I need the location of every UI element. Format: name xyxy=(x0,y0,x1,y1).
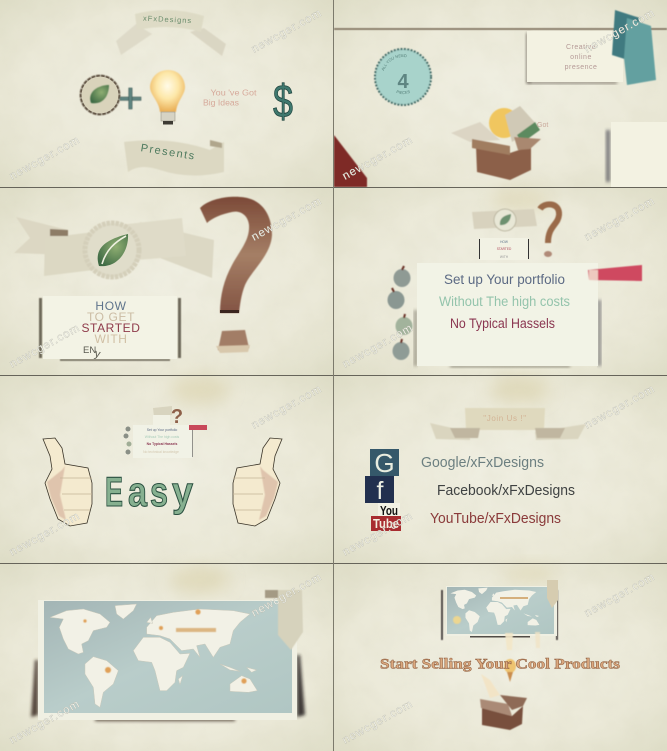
heading: easy: y xyxy=(172,468,194,515)
panel: join us xyxy=(365,408,586,531)
icon: question mark xyxy=(200,197,272,353)
heading: start selling: Start Selling Your Cool Products xyxy=(380,656,620,672)
watermarks: newcger.com xyxy=(583,195,657,244)
watermarks: newcger.com xyxy=(341,322,415,371)
mini card: WITH xyxy=(500,255,509,259)
ribbon: join us: "Join Us !" xyxy=(483,414,527,423)
card: portfolio benefits: Set up Your portfolio xyxy=(444,272,565,287)
text: social links: Google/xFxDesigns xyxy=(421,454,544,471)
small map xyxy=(441,580,558,640)
card: how to get started with: EN xyxy=(83,345,96,356)
icon: google: G xyxy=(374,448,395,478)
text: got fragment: Got xyxy=(537,122,548,129)
clothes line xyxy=(334,28,667,30)
mini storyboard xyxy=(124,406,207,458)
watermarks: newcger.com xyxy=(583,571,657,620)
red tape xyxy=(588,265,642,281)
watermarks: newcger.com xyxy=(8,698,82,747)
card: portfolio benefits xyxy=(414,263,601,368)
mini storyboard: ? xyxy=(171,406,183,428)
icon: facebook xyxy=(365,476,394,505)
watermarks: newcger.com xyxy=(8,322,82,371)
watermarks: newcger.com xyxy=(341,134,415,183)
icon: stamp 4 pieces: 4 xyxy=(397,71,409,93)
map pins xyxy=(83,609,247,684)
mini card: STARTED xyxy=(497,247,512,251)
panel: start selling xyxy=(380,580,620,730)
floating light bulbs xyxy=(453,616,540,698)
folded ribbon xyxy=(265,590,303,650)
text: you've got big ideas xyxy=(203,88,257,108)
mini storyboard: Without The high costs xyxy=(145,435,180,439)
note: creative online presence: presence xyxy=(565,64,597,71)
teal paper xyxy=(612,10,656,85)
mini ribbon badge xyxy=(472,209,537,231)
white note corner xyxy=(606,122,667,187)
panel: easy xyxy=(43,406,282,526)
ribbon with leaf badge xyxy=(14,217,214,278)
map land xyxy=(50,604,257,707)
map label bar xyxy=(176,628,216,632)
mini card: HOW xyxy=(500,240,508,244)
heading: easy xyxy=(105,468,194,515)
card: how to get started with xyxy=(39,296,181,361)
icon: dollar sign: $ xyxy=(273,75,293,127)
icon: light bulb xyxy=(150,70,185,124)
icon: box xyxy=(480,695,527,730)
icon: youtube: You xyxy=(380,504,398,518)
text: social links: Facebook/xFxDesigns xyxy=(437,482,575,499)
watermarks: newcger.com xyxy=(341,698,415,747)
text: you've got big ideas: You 've Got xyxy=(210,88,257,98)
icon: leaf badge xyxy=(81,76,119,114)
icon: right thumb up xyxy=(233,438,282,526)
card: how to get started with: STARTED xyxy=(81,321,141,335)
note: creative online presence xyxy=(526,31,623,84)
ribbon: presents xyxy=(124,140,224,176)
watermarks: newcger.com xyxy=(250,7,324,56)
ribbon: xFxDesigns: xFxDesigns xyxy=(143,14,192,25)
panel: creative online presence xyxy=(334,10,667,187)
card: portfolio benefits: No Typical Hassels xyxy=(450,316,555,331)
watermarks: newcger.com xyxy=(583,7,657,56)
mini storyboard: Set up Your portfolio xyxy=(147,428,177,432)
map card xyxy=(38,600,297,720)
watermarks: newcger.com xyxy=(250,383,324,432)
icon: leaf badge large xyxy=(85,223,139,277)
watermarks: newcger.com xyxy=(341,510,415,559)
icon: stamp 4 pieces: ALL YOU NEED xyxy=(382,54,407,71)
card: how to get started with: WITH xyxy=(94,332,128,346)
panel: portfolio list xyxy=(388,204,642,368)
icon: stamp 4 pieces: PIECES xyxy=(396,90,410,94)
watermarks: newcger.com xyxy=(8,510,82,559)
watermarks: newcger.com xyxy=(250,571,324,620)
mini storyboard: No Typical Hassels xyxy=(147,442,177,446)
card: how to get started with: y xyxy=(93,348,102,361)
panel: intro presents xyxy=(81,10,293,176)
heading: easy: a xyxy=(128,468,148,515)
mini question mark xyxy=(540,204,559,257)
icon: stamp 4 pieces xyxy=(373,47,433,107)
ribbon: xFxDesigns xyxy=(116,10,226,56)
icon: facebook: f xyxy=(377,477,384,505)
ribbon: presents: Presents xyxy=(140,142,196,163)
panel: how to get started xyxy=(14,197,272,361)
text: social links xyxy=(421,454,575,527)
text: social links: YouTube/xFxDesigns xyxy=(430,510,561,527)
icon: google xyxy=(370,448,399,478)
card: how to get started with: HOW xyxy=(95,299,127,313)
ribbon: join us xyxy=(430,408,586,440)
card: how to get started with: TO GET xyxy=(87,310,135,324)
watermarks: newcger.com xyxy=(583,383,657,432)
note: creative online presence: online xyxy=(570,54,592,61)
watermarks: newcger.com xyxy=(8,134,82,183)
hanging tags xyxy=(388,266,412,360)
icon: left thumb up xyxy=(43,438,92,526)
heading: easy: E xyxy=(105,468,123,515)
red triangle xyxy=(334,135,367,187)
map sea xyxy=(44,601,292,713)
card: portfolio benefits: Without The high costs xyxy=(439,294,570,309)
icon: open box xyxy=(451,106,541,180)
plus sign xyxy=(120,88,141,109)
icon: youtube: Tube xyxy=(373,517,399,531)
map shadows xyxy=(31,655,305,721)
icon: youtube xyxy=(371,503,401,531)
panel: world map xyxy=(31,590,305,721)
heading: easy: s xyxy=(150,468,168,515)
watermarks: newcger.com xyxy=(250,195,324,244)
text: you've got big ideas: Big Ideas xyxy=(203,98,239,108)
mini storyboard: No technical knowledge xyxy=(143,450,179,454)
mini card xyxy=(479,238,529,260)
note: creative online presence: Creative xyxy=(566,44,596,51)
